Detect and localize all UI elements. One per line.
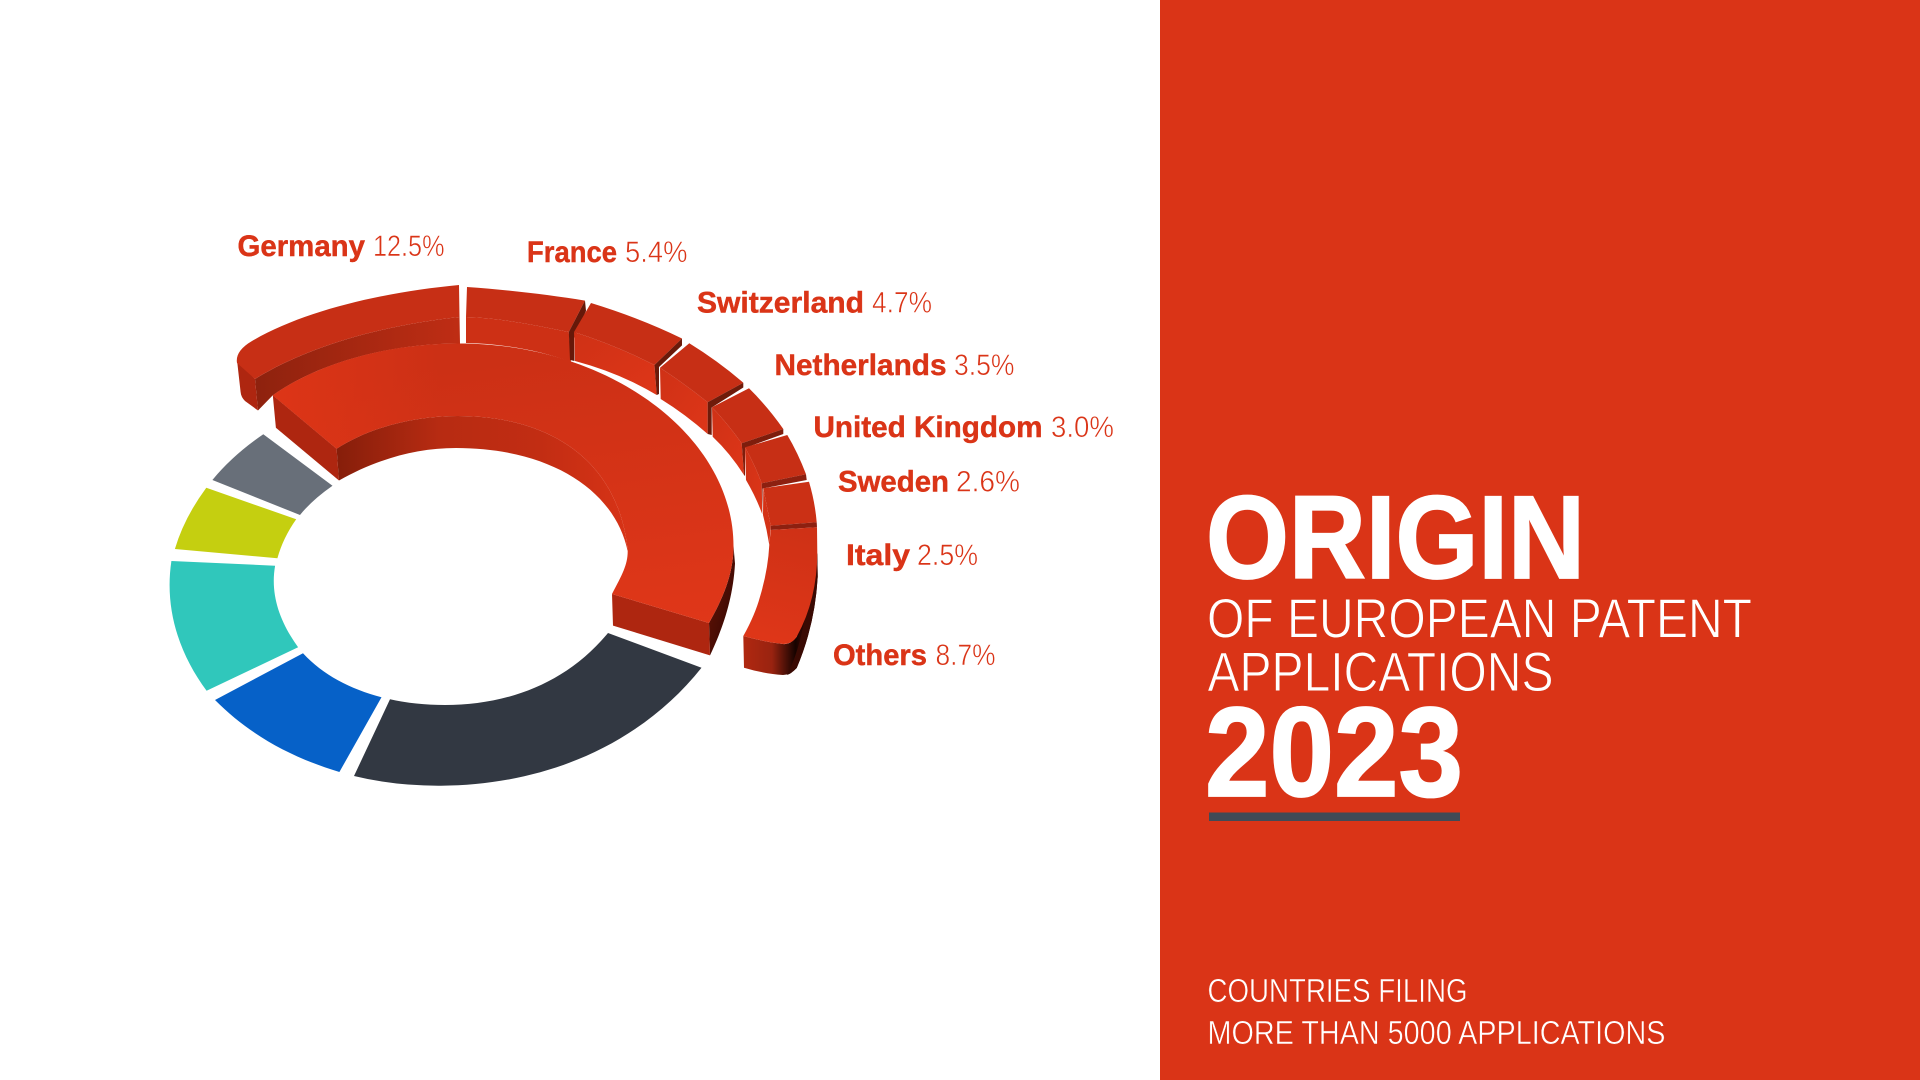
label: Sweden: Sweden: [838, 466, 949, 498]
label: France: France: [527, 236, 617, 269]
label: Switzerland: Switzerland: [697, 286, 864, 320]
footnote: countries filing: MORE THAN 5000 APPLICATIONS: [1208, 1015, 1666, 1052]
year: 2023: 2023: [1205, 681, 1463, 823]
label: Italy: [846, 539, 978, 572]
outer ring: United Kingdom slice: [712, 388, 783, 476]
label: United Kingdom: 3.0%: [1051, 411, 1114, 444]
label: Italy: Italy: [846, 539, 910, 572]
label: Others: Others: [833, 639, 927, 672]
title line: applications: APPLICATIONS: [1208, 641, 1554, 703]
outer ring: Others slice: [743, 527, 818, 675]
main slice: combined inner arc: [273, 343, 735, 655]
outer ring: France slice: [466, 287, 586, 362]
outer ring: Switzerland slice: [574, 303, 682, 395]
label: France: 5.4%: [625, 236, 688, 269]
segment: dark: [354, 633, 702, 786]
label: Sweden: 2.6%: [956, 466, 1020, 498]
segment: grey: [212, 434, 332, 515]
label: Sweden: [838, 466, 1020, 498]
label: Germany: [238, 230, 444, 263]
outer ring: Italy slice: [763, 482, 817, 545]
underline bar: [1209, 812, 1460, 821]
segment: teal: [170, 561, 298, 691]
footnote: countries filing: COUNTRIES FILING: [1208, 973, 1468, 1010]
segment: lime: [175, 488, 296, 558]
title: ORIGIN: ORIGIN: [1206, 472, 1585, 604]
label: Others: 8.7%: [936, 639, 996, 672]
panel: red title panel: [1160, 0, 1920, 1080]
outer ring: Sweden slice: [745, 435, 807, 514]
label: United Kingdom: United Kingdom: [814, 411, 1042, 444]
segment: blue: [215, 653, 382, 772]
footnote: countries filing: [1208, 973, 1666, 1052]
label: France: [527, 236, 688, 269]
title line: of European patent: OF EUROPEAN PATENT: [1207, 588, 1752, 650]
label: Netherlands: 3.5%: [954, 349, 1014, 382]
label: Others: [833, 639, 996, 672]
donut chart: [170, 285, 818, 786]
label: Germany: Germany: [238, 230, 365, 263]
outer ring: Netherlands slice: [660, 343, 743, 435]
label: Italy: 2.5%: [917, 539, 978, 572]
label: Switzerland: 4.7%: [872, 286, 932, 320]
label: Germany: 12.5%: [373, 230, 444, 263]
label: Netherlands: Netherlands: [774, 349, 946, 382]
outer ring: Germany slice: [237, 285, 460, 410]
